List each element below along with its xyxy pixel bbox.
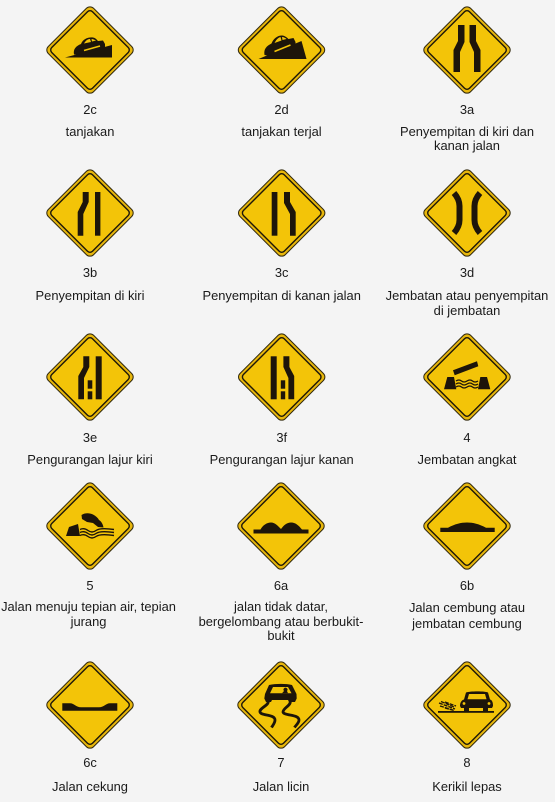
- number: 2c: [83, 102, 97, 117]
- caption: tanjakan: [66, 124, 114, 139]
- number: 3d: [460, 265, 474, 280]
- number: 6b: [460, 578, 474, 593]
- number: 3a: [460, 102, 475, 117]
- icon: road narrows right: [236, 168, 327, 258]
- icon: narrow bridge: [422, 168, 512, 258]
- caption: Pengurangan lajur kanan: [210, 452, 354, 467]
- panel: sign 6a: bukit: [267, 628, 295, 643]
- panel: sign 6a: bergelombang atau berbukit-: [199, 614, 363, 629]
- icon: road narrows both sides: [422, 5, 512, 95]
- panel: sign 3e: [27, 332, 153, 467]
- number: 7: [277, 755, 285, 770]
- caption: Jalan cekung: [52, 779, 128, 794]
- caption: Penyempitan di kiri dan: [400, 124, 534, 139]
- panel: sign 2d: [236, 5, 327, 139]
- panel: sign 3a: [400, 5, 534, 153]
- icon: uneven road: [236, 481, 326, 571]
- caption: Pengurangan lajur kiri: [27, 452, 153, 467]
- caption: Penyempitan di kiri: [36, 288, 144, 303]
- caption: Jalan cembung atau: [409, 600, 525, 615]
- panel: sign 6c: [45, 660, 135, 794]
- panel: sign 4: [418, 332, 517, 467]
- panel: sign 6a: [199, 481, 363, 643]
- icon: left lane reduction: [45, 332, 135, 422]
- icon: dip: [45, 660, 135, 750]
- icon: loose gravel: [422, 660, 512, 750]
- number: 3b: [83, 265, 97, 280]
- caption: Jembatan atau penyempitan: [386, 288, 548, 303]
- panel: sign 6b: jembatan cembung: [411, 616, 522, 631]
- number: 2d: [274, 102, 289, 117]
- panel: sign 8: [422, 660, 512, 794]
- panel: sign 3d: di jembatan: [434, 303, 500, 318]
- caption: jalan tidak datar,: [233, 599, 328, 614]
- number: 3f: [276, 430, 287, 445]
- icon: steep uphill sign: [236, 5, 327, 95]
- number: 3e: [83, 430, 97, 445]
- number: 6c: [83, 755, 97, 770]
- icon: hump: [422, 481, 512, 571]
- icon: road towards water edge: [45, 481, 135, 571]
- caption: Penyempitan di kanan jalan: [203, 288, 361, 303]
- number: 6a: [274, 578, 289, 593]
- caption: Jalan menuju tepian air, tepian: [1, 599, 176, 614]
- number: 3c: [275, 265, 289, 280]
- number: 5: [86, 578, 94, 593]
- panel: sign 5: [1, 481, 176, 629]
- caption: Jalan licin: [253, 779, 309, 794]
- panel: sign 5: jurang: [70, 614, 106, 629]
- number: 4: [463, 430, 471, 445]
- icon: slippery road: [236, 660, 326, 750]
- caption: Kerikil lepas: [432, 779, 502, 794]
- panel: sign 3f: [210, 332, 354, 467]
- icon: drawbridge: [422, 332, 512, 422]
- icon: uphill sign: [45, 5, 135, 95]
- caption: Jembatan angkat: [418, 452, 517, 467]
- number: 8: [463, 755, 471, 770]
- icon: road narrows left: [45, 168, 135, 258]
- panel: sign 2c: [45, 5, 135, 139]
- panel: sign 6b: [409, 481, 525, 631]
- panel: sign 3c: [203, 168, 361, 303]
- icon: right lane reduction: [236, 332, 327, 422]
- panel: sign 3d: [386, 168, 548, 318]
- caption: tanjakan terjal: [241, 124, 322, 139]
- panel: sign 3b: [36, 168, 144, 303]
- panel: sign 3a: kanan jalan: [434, 138, 500, 153]
- panel: sign 7: [236, 660, 326, 794]
